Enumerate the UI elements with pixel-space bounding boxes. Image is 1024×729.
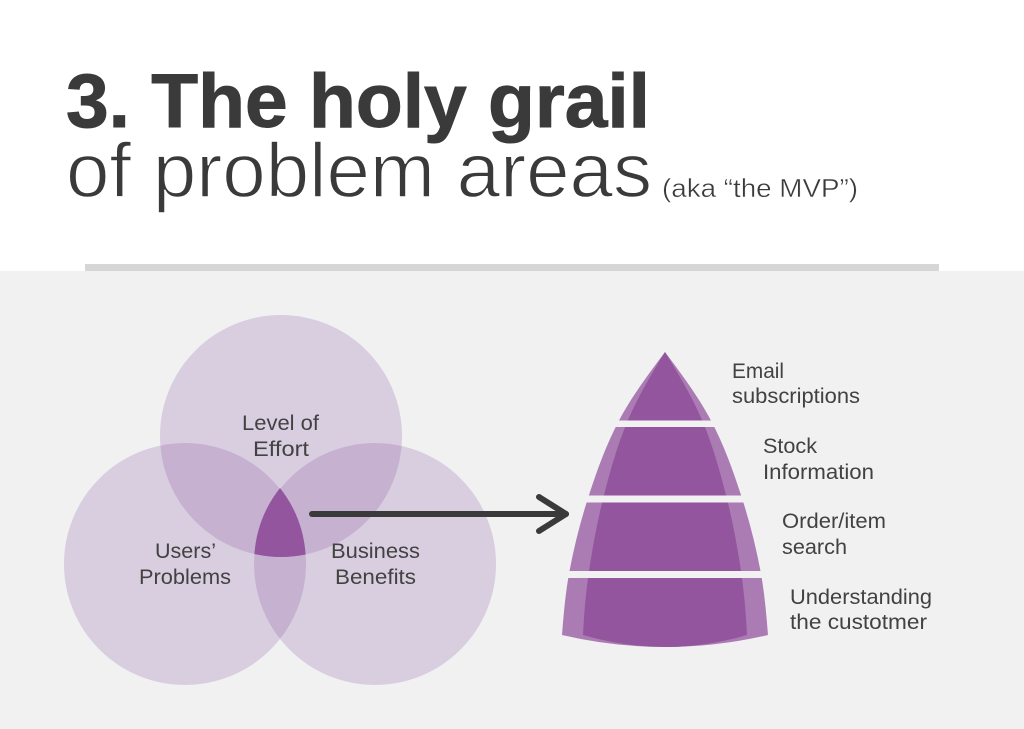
venn diagram (64, 315, 496, 685)
label: level of effort (242, 412, 319, 461)
circle: business benefits (254, 443, 496, 685)
venn centre overlap (254, 488, 306, 557)
label: level of effort: Effort (253, 438, 309, 461)
title: of problem areas (66, 128, 652, 214)
pyramid outer shape (562, 352, 768, 647)
label: email subscriptions (732, 360, 860, 408)
label: stock information (763, 435, 874, 484)
label: users' problems (139, 540, 231, 589)
label: order/item search (782, 510, 886, 559)
label: level of effort: Level of (242, 412, 319, 435)
label: understanding the customer (790, 586, 932, 634)
label: understanding the customer: Understanding (790, 586, 932, 609)
label: stock information: Stock (763, 435, 818, 458)
pyramid inner shape (583, 352, 747, 647)
label: email subscriptions: Email (732, 360, 784, 383)
circle: users' problems (64, 443, 306, 685)
label: order/item search: search (782, 536, 847, 559)
title (66, 59, 652, 214)
subtitle note: (aka “the MVP”) (662, 173, 858, 203)
circle: level of effort (160, 315, 402, 557)
label: business benefits (331, 540, 420, 589)
label: business benefits: Business (331, 540, 420, 563)
label: business benefits: Benefits (335, 566, 416, 589)
arrow (312, 497, 566, 531)
title: 3. The holy grail (66, 59, 650, 144)
label: understanding the customer: the custotmer (790, 611, 927, 634)
label: stock information: Information (763, 461, 874, 484)
label: users' problems: Users’ (155, 540, 216, 563)
pyramid (550, 352, 780, 647)
label: order/item search: Order/item (782, 510, 886, 533)
label: email subscriptions: subscriptions (732, 385, 860, 408)
label: users' problems: Problems (139, 566, 231, 589)
